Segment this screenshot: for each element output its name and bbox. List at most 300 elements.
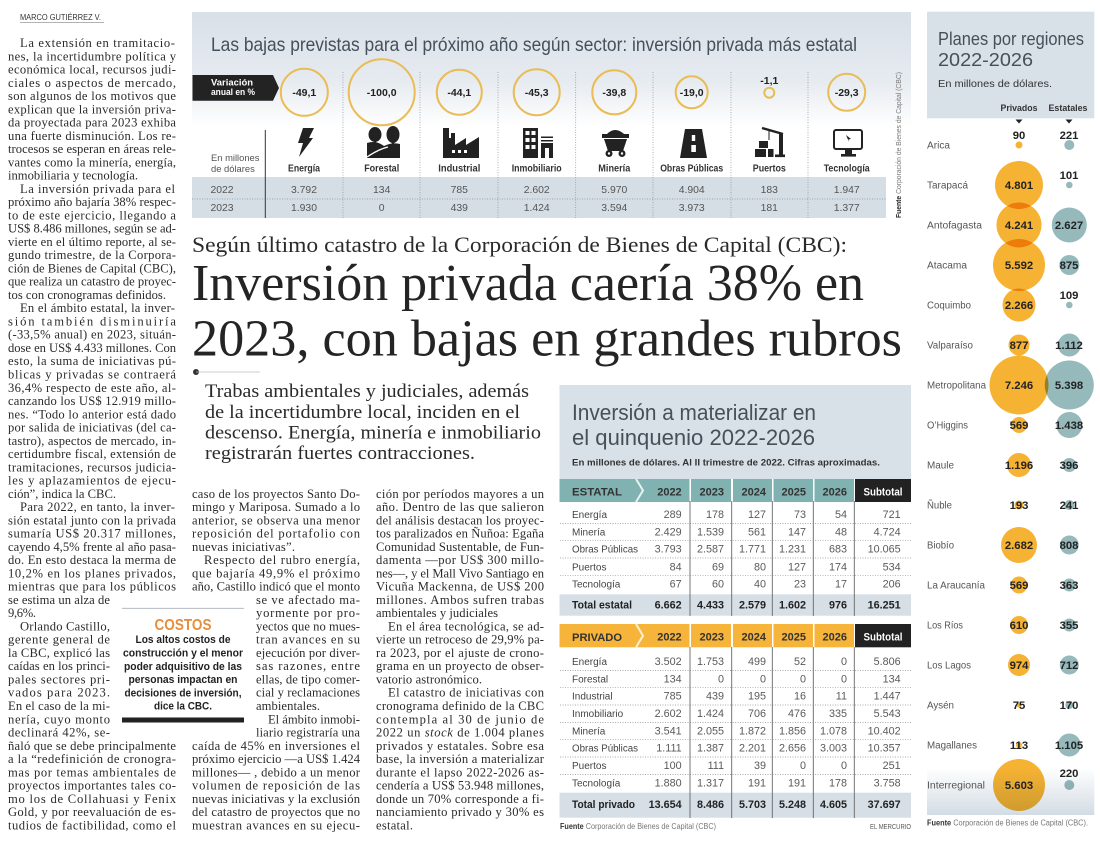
article text: column 3: del análisis destacan los proyec- [376,513,544,527]
table header: estatal: 2026 [823,486,847,498]
article text: column 1: próximo año bajaría 38% respec- [8,195,176,209]
article text: column 1: nes, la incertidumbre política y [8,49,177,63]
region names: La Araucanía [927,580,985,592]
rows: estatal: 40 [754,579,766,591]
region names: Magallanes [927,740,977,752]
sector labels: Puertos [753,164,786,174]
region names: Metropolitana [927,380,986,392]
article text: column 1: mientras que para los públicos [8,580,176,594]
private values: 5.603 [1005,780,1033,792]
article text: column 2: próximo ejercicio —a US$ 1.424 [192,752,361,766]
main headline: 2023, con bajas en grandes rubros [192,311,902,368]
rows: estatal: 80 [754,561,766,573]
private values: 5.592 [1005,260,1033,272]
article text: column 1: 9,6%. [8,606,36,620]
state values: 170 [1060,700,1078,712]
article text: column 3: tos paralizados en Ñuñoa: Egaña [376,527,544,541]
rows: privado: 195 [748,691,766,703]
rows: privado: 100 [664,760,682,772]
state values: 363 [1060,580,1078,592]
article text: column 2: ellas, de tipo comer- [256,672,360,686]
article text: column 1: pales sectores pri- [8,672,110,686]
icon: minería [602,130,629,157]
private values: 1.196 [1005,460,1033,472]
rows: estatal: 1.231 [779,544,806,556]
total row: estatal: 2.579 [739,600,766,612]
article text: column 2: tran avances en su [256,633,361,647]
icon: inmobiliario [523,128,553,158]
total row: privado: 5.248 [779,799,806,811]
rows: privado: 0 [841,656,847,668]
private values: 610 [1010,620,1028,632]
rows: privado: 3.003 [820,743,847,755]
state values: 109 [1060,290,1078,302]
article text: column 1: Orlando Castillo, [20,619,110,633]
heading: regions title: Planes por regiones [938,29,1084,49]
article text: column 1: gundo trimestre, de la Corpora- [8,248,176,262]
article text: column 1: son algunos de los motivos que [8,89,176,103]
rows: privado: 0 [841,760,847,772]
rows: estatal: 54 [835,509,847,521]
article text: column 1: 36,4% respecto de este año, al- [8,381,176,395]
state values: 221 [1060,130,1078,142]
rows: estatal: 67 [670,579,682,591]
row: 2023: 0 [379,203,385,214]
article text: column 2: reposición del portafolio con [192,527,361,541]
article text: column 3: grama en un proyecto de obser- [376,659,544,673]
article text: column 1: proyectos importantes tales co- [8,779,176,793]
row: 2023: 1.930 [291,203,317,214]
source note: tables: Fuente Corporación de Bienes de Capital (CBC) [560,822,716,831]
icon: energía [298,128,314,157]
article text: column 3: ción por períodos mayores a un [376,487,545,501]
sector labels: Inmobiliario [512,164,562,174]
rows: privado: Minería [572,726,606,737]
state values: 101 [1060,170,1078,182]
article text: column 1: inmobiliaria y tecnología. [8,169,138,183]
rows: estatal: 2.587 [697,544,724,556]
rows: estatal: 73 [794,509,806,521]
rows: privado: Industrial [572,692,613,703]
region names: Arica [927,140,950,152]
rows: privado: Forestal [572,674,608,685]
rows: privado: 0 [841,673,847,685]
callout: costos: construcción y el menor [123,648,244,660]
table header: privado: 2023 [700,632,724,644]
region names [927,140,986,792]
rows: estatal: 127 [788,561,806,573]
state values: 1.105 [1055,740,1083,752]
callout: costos: poder adquisitivo de las [124,661,242,673]
rows: estatal: Obras Públicas [572,545,638,556]
article text: column 1: En el ámbito estatal, la inver- [20,301,175,315]
article text: column 1: explican que la inversión priva- [8,102,176,116]
article text: column 1: Gold, y por reevaluación de es- [8,805,176,819]
rows: privado: 39 [754,760,766,772]
subheading: descenso. Energía, minería e inmobiliario [205,422,541,444]
region names: Ñuble [927,498,952,512]
article text: column 1: tudios de factibilidad, como el [8,818,176,832]
chart: variation circles: -49,1 [292,87,316,99]
rows: estatal: 17 [835,579,847,591]
article text: column 1: sión estatal junto con la privada [8,513,176,527]
rows: estatal: 561 [748,526,766,538]
article text: column 1: dose en US$ 4.433 millones. Con [8,341,177,355]
heading: tables title: Inversión a materializar en [572,400,816,425]
total row: estatal: 6.662 [655,600,682,612]
article text: column 1: canzando los US$ 12.919 millo- [8,394,176,408]
label: variación anual tag: Variación [211,76,253,88]
chart: variation circles: -39,8 [602,87,626,99]
table: estatal [560,479,911,616]
row: 2022: 134 [373,185,391,196]
article text: column 3: donde un 70% corresponde a fi- [376,792,544,806]
rows: estatal: 4.724 [874,526,901,538]
article text: column 2: yectos que no mues- [256,619,360,633]
article text: column 1: Para 2022, en tanto, la inver- [20,500,175,514]
sector labels: Minería [598,164,630,174]
rows: estatal: 178 [706,509,724,521]
article text: column 1: que realiza un catastro de proyec- [8,275,176,289]
rows: privado: 1.387 [697,743,724,755]
rows: privado: 2.201 [739,743,766,755]
callout: costos: dice la CBC. [154,701,212,713]
rows: privado: 1.317 [697,777,724,789]
rows: estatal: 174 [829,561,847,573]
rows: privado: 0 [800,673,806,685]
row: 2022: 3.792 [291,185,317,196]
subtitle: En millones de dólares. [938,79,1052,90]
row: 2022: 1.947 [834,185,860,196]
rows: privado: 2.656 [779,743,806,755]
article text: column 3: El catastro de iniciativas con [388,686,545,700]
private values: 974 [1010,660,1029,672]
rows: estatal [572,509,901,591]
rows: privado: 439 [706,691,724,703]
table header: privado: Subtotal [864,632,902,644]
row: 2023: 3.973 [679,203,705,214]
article text: column 1: tos con cronogramas definidos. [8,288,166,302]
total row: estatal: 976 [829,600,847,612]
rows: privado: 16 [794,691,806,703]
article text: column 3: base, la inversión a materializar [376,752,545,766]
total row: estatal: 16.251 [868,600,901,612]
source note: vertical: Fuente Corporación de Bienes de Capital (CBC) [894,72,903,218]
callout: costos [122,608,244,722]
rows: privado: 11 [836,691,847,703]
column headers: Privados [1000,103,1038,114]
article text: column 1: tastro), aspectos de mercado, in- [8,434,176,448]
rows: privado: 785 [664,691,682,703]
private values: 75 [1013,700,1025,712]
article text: column 2: nuevas iniciativas y la exclusión [192,792,361,806]
table bands [192,72,886,218]
table: privado [560,624,911,818]
headline kicker: Según último catastro de la Corporación de Bienes de Capital (CBC): [192,232,847,257]
rows: privado: 251 [883,760,901,772]
rows: estatal: Minería [572,527,606,538]
chart: variation circles: -45,3 [525,87,549,99]
article text: column 1: La extensión en tramitacio- [20,36,175,50]
table header: privado [560,624,911,647]
heading: sector panel title: Las bajas previstas para el próximo año según sector: inversión privada más estatal [211,34,857,56]
rows: privado: Puertos [572,761,606,772]
rows: estatal: 721 [883,509,901,521]
rows: privado: 178 [829,777,847,789]
article text: column 1: ción”, indica la CBC. [8,487,116,501]
row: 2022: 785 [451,185,468,196]
article text: column 3: ambientales y judiciales [376,606,498,620]
total row: estatal: 1.602 [779,600,806,612]
rows: privado: 3.758 [874,777,901,789]
rows: estatal: 147 [788,526,806,538]
article text: column 1: vantes como la minería, energía, [8,155,176,169]
state values: 5.398 [1055,380,1083,392]
rows: estatal: 127 [748,509,766,521]
table header: privado: 2025 [782,632,806,644]
article text: column 1: ñaló que se debe principalmente [8,739,176,753]
article text: column 3: nanciamiento privado y 30% es [376,805,544,819]
rows: privado: 111 [708,760,724,772]
article text: column 1: caídas en los princi- [8,659,110,673]
rows: privado: 5.543 [874,708,901,720]
total row: estatal: 4.433 [697,600,724,612]
rows: privado: 476 [788,708,806,720]
article text: column 1: vados para 2023. [8,686,110,700]
unit note: de dólares [211,163,255,174]
article text: column 1: les y aplazamientos de ejecu- [8,474,176,488]
article text: column 1: a la “redefinición de cronogra- [8,752,176,766]
article text: column 2: mingo y Mariposa. Sumado a lo [192,500,360,514]
rows: privado: 499 [748,656,766,668]
panel: sector declines [192,12,911,218]
private values: 569 [1010,580,1028,592]
row: 2023: 1.377 [834,203,860,214]
article text: column 1 [8,36,177,832]
row: 2023: 439 [451,203,468,214]
sector labels: Tecnología [824,164,870,174]
unit note: En millones [211,152,260,163]
sector labels: Obras Públicas [660,164,723,174]
article text: column 2: sas razones, entre [256,659,360,673]
article text: column 1: mas por temas ambientales de [8,765,176,779]
article text: column 3: damenta —por US$ 300 millo- [376,553,544,567]
rows: privado: 1.753 [697,656,724,668]
article text: column 2: caso de los proyectos Santo Do- [192,487,360,501]
rows: privado: 335 [829,708,847,720]
article text: column 1: En el caso de la mi- [8,699,110,713]
row: 2022: 2.602 [524,185,550,196]
rows: privado: 1.447 [874,691,901,703]
total row: privado: 8.486 [697,799,724,811]
byline: MARCO GUTIÉRREZ V. [20,12,101,22]
rows: privado: Obras Públicas [572,744,638,755]
rows: privado: 3.502 [655,656,682,668]
rows: privado: 2.602 [655,708,682,720]
total row: privado: 13.654 [649,799,682,811]
row: 2022: 5.970 [601,185,628,196]
rows: privado: 10.357 [868,743,901,755]
article text: column 2: caída de 45% en inversiones el [192,739,360,753]
article text: column 1: 10,2% en los planes privados, [8,566,176,580]
chart: private bubbles [990,142,1048,811]
row: 2022 [210,185,860,196]
rows: estatal: 534 [883,561,901,573]
rows: privado: 1.872 [739,725,766,737]
rows: privado: 5.806 [874,656,901,668]
article text: column 1: (-33,5% anual) en 2023, situán- [8,328,176,342]
region names: Valparaíso [927,340,973,352]
table header: estatal: 2024 [742,486,767,498]
article text: column 1: do. En esto destaca la merma de [8,553,176,567]
article text: column 1: se estima un alza de [8,593,110,607]
icon: obras públicas [680,129,707,158]
region names: Los Lagos [927,660,971,672]
panel: investment tables [560,385,911,831]
article text: column 1: declinará 42%, se- [8,726,110,740]
article text: column 3: Vicuña Mackenna, de US$ 200 [376,580,544,594]
article text: column 2: yormente por pro- [256,606,360,620]
rows: estatal: 1.771 [739,544,766,556]
row: 2023: 181 [761,203,778,214]
table header: estatal: Subtotal [864,486,902,498]
rows: estatal: 289 [664,509,682,521]
article text: column 3: nes—, y el Mall Vivo Santiago en [376,566,545,580]
region names: Biobío [927,540,954,552]
article text: column 3: millones. Ambos sufren trabas [376,593,544,607]
callout: costos: personas impactan en [128,674,238,686]
article text: column 3: estatal. [376,818,413,832]
rows: estatal: Tecnología [572,580,621,591]
table header: estatal: 2022 [657,486,682,498]
article text: column 2: Respecto del rubro energía, [204,553,360,567]
article text: column 1: esto, la suma de iniciativas pú- [8,354,176,368]
row: 2022: 4.904 [679,185,705,196]
total row: privado: Total privado [572,799,635,811]
rows: privado: 191 [748,777,766,789]
callout: costos: decisiones de inversión, [124,687,242,699]
article text: column 1: nería, cuyo monto [8,712,110,726]
article text: column 1: ción de Bienes de Capital (CBC), [8,261,176,275]
rows: estatal: 3.793 [655,544,682,556]
region names: Maule [927,460,954,472]
private values: 4.801 [1005,180,1033,192]
region names: Los Ríos [927,620,963,632]
label: variación anual tag: anual en % [211,86,256,97]
region names: Coquimbo [927,300,971,312]
private values: 193 [1010,500,1028,512]
article text: column 1: ciales o aspectos de mercado, [8,76,176,90]
region names: Tarapacá [927,180,968,192]
article text: column 2: El ámbito inmobi- [268,712,360,726]
table header: estatal [560,479,911,502]
article text: column 1: la CBC, explicó las [8,646,110,660]
rows: estatal: 683 [829,544,847,556]
article text: column 3: contempla al 30 de junio de [376,712,544,726]
article text: column 3: vatorio astronómico. [376,672,482,686]
chart: variation circles: -44,1 [447,87,471,99]
article text: column 1: trocesos se esperan en áreas rele- [8,142,176,156]
rows: estatal: 1.539 [697,526,724,538]
sector labels: Industrial [438,164,480,174]
private values: 7.246 [1005,380,1033,392]
column headers: Estatales [1048,103,1088,114]
subheading: Trabas ambientales y judiciales, además [205,381,529,402]
rows: estatal: 69 [712,561,724,573]
total row: privado: 4.605 [820,799,847,811]
row: 2023: 1.424 [524,203,550,214]
article text: column 1: da proyectada para 2023 exhiba [8,116,176,130]
region names: Aysén [927,700,954,712]
article text: column 3: año. Dentro de las que salieron [376,500,545,514]
callout: costos: COSTOS [154,617,212,634]
rows: privado: 1.111 [656,743,682,755]
subtitle: En millones de dólares. Al II trimestre de 2022. Cifras aproximadas. [572,458,880,468]
article text: column 2: ejecución por diver- [256,646,360,660]
rows: estatal: 84 [670,561,682,573]
article text: column 1: una fuerte disminución. Los re- [8,129,176,143]
total row: privado: 5.703 [739,799,766,811]
state values: 241 [1060,500,1078,512]
heading: tables title [572,400,816,450]
subheading: de la incertidumbre local, inciden en el [205,402,520,423]
article text: column 3: durante el lapso 2022-2026 as- [376,765,544,779]
rows: privado: 1.880 [655,777,682,789]
state values: 1.112 [1055,340,1083,352]
article text: column 1: sión también disminuiría [8,314,176,328]
article text: column 3: cronograma definido de la CBC [376,699,544,713]
article text: column 1: económica local, recursos judi- [8,62,176,76]
article text: column 3: vierte un retroceso de 29,9% pa- [376,633,544,647]
article text: column 1: sumaría US$ 20.317 millones, [8,527,176,541]
rows: privado [572,656,901,789]
table header: privado: 2022 [657,632,682,644]
rows: privado: 706 [748,708,766,720]
row: 2022: 183 [761,185,778,196]
article text: column 2: del catastro de proyectos que no [192,805,360,819]
main headline [192,255,902,368]
rows: estatal: Puertos [572,562,606,573]
article text: column 1: to de este ejercicio, llegando a [8,208,176,222]
rows: privado: 134 [883,673,901,685]
rows: privado: Tecnología [572,778,621,789]
chart: variation circles: -19,0 [680,87,704,99]
article text: column 3: ra 2023, por el ajuste de crono- [376,646,544,660]
chart: variation circles: -1,1 [760,75,779,87]
state values: 220 [1060,768,1078,780]
rows: estatal: 60 [712,579,724,591]
article text: column 2: millones— , debido a un menor [192,765,361,779]
row: 2023: 2023 [210,203,234,214]
rows: privado: 1.424 [697,708,724,720]
state values: 1.438 [1055,420,1083,432]
article text: column 1: mo los de Collahuasi y Fenix [8,792,177,806]
sector labels: Forestal [364,164,399,174]
rows: estatal: 10.065 [868,544,901,556]
heading: regions title [938,29,1084,70]
state values: 808 [1060,540,1078,552]
article text: column 3 [376,487,545,832]
rows: estatal: 23 [794,579,806,591]
region names: Interregional [927,780,985,792]
total row: privado: 37.697 [868,799,901,811]
state values [1055,130,1083,780]
callout: costos: Los altos costos de [136,634,230,646]
article text: column 1: blicas y privadas se contraerá [8,368,176,382]
article text: column 1: nes. “Todo lo anterior está dado [8,407,176,421]
sector labels: Energía [288,164,320,174]
article text: column 2: volumen de reposición de las [192,779,360,793]
